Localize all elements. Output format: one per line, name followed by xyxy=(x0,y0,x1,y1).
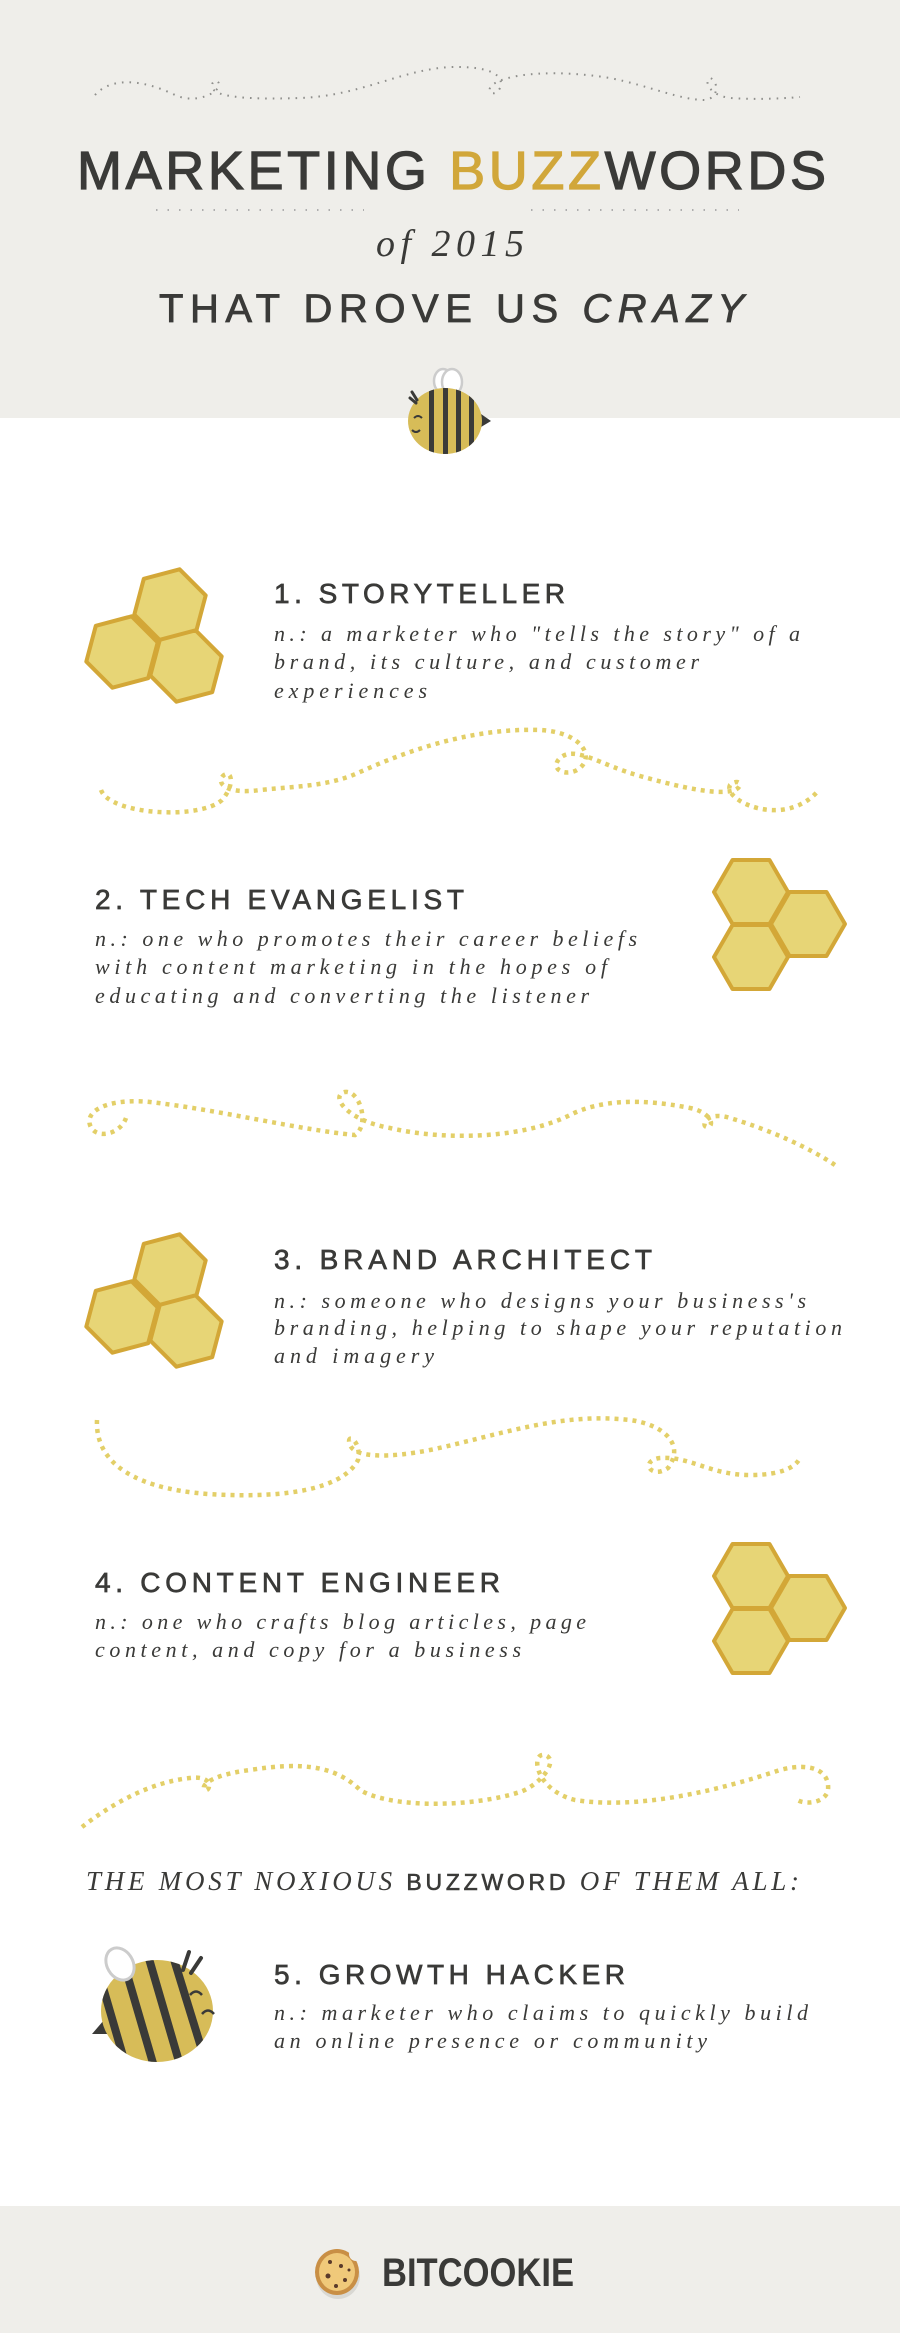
definition: brand architect xyxy=(274,1288,842,1368)
callout: most noxious buzzword: THE MOST NOXIOUS BUZZWORD OF THEM ALL: xyxy=(86,1866,799,1896)
definition: storyteller: brand, its culture, and customer xyxy=(274,649,699,674)
panel: brand architect xyxy=(86,1234,842,1368)
subtitle: of 2015: of 2015 xyxy=(376,223,524,265)
heading: brand architect: 3. BRAND ARCHITECT xyxy=(274,1244,652,1275)
dotted swirl 3 xyxy=(97,1418,800,1495)
heading: tech evangelist: 2. TECH EVANGELIST xyxy=(95,884,464,915)
definition: brand architect: and imagery xyxy=(274,1343,434,1368)
title underline dots xyxy=(156,209,739,211)
definition: brand architect: branding, helping to shape your reputation xyxy=(274,1315,842,1340)
panel: tech evangelist xyxy=(95,860,845,1008)
definition: tech evangelist: educating and converting the listener xyxy=(95,983,589,1008)
subtitle: that drove us crazy: THAT DROVE US CRAZY xyxy=(159,287,747,331)
panel: storyteller xyxy=(86,569,800,703)
footer xyxy=(0,2206,900,2333)
definition: tech evangelist: n.: one who promotes their career beliefs xyxy=(95,926,637,951)
icon: cookie xyxy=(315,2247,363,2299)
icon: small bee xyxy=(408,368,491,454)
heading: growth hacker: 5. GROWTH HACKER xyxy=(274,1959,625,1990)
definition: storyteller: experiences xyxy=(274,678,427,703)
title: MARKETING BUZZWORDS xyxy=(77,141,826,201)
header dotted swirl xyxy=(95,67,800,100)
definition: content engineer xyxy=(95,1609,586,1662)
definition: content engineer: n.: one who crafts blog articles, page xyxy=(95,1609,586,1634)
definition: tech evangelist xyxy=(95,926,637,1008)
panel: growth hacker xyxy=(92,1946,808,2062)
definition: content engineer: content, and copy for a business xyxy=(95,1637,521,1662)
icon: honeycomb left xyxy=(86,569,222,702)
heading: storyteller: 1. STORYTELLER xyxy=(274,578,565,609)
definition: tech evangelist: with content marketing in the hopes of xyxy=(95,954,610,979)
definition: growth hacker: n.: marketer who claims to quickly build xyxy=(274,2000,809,2025)
heading: content engineer: 4. CONTENT ENGINEER xyxy=(95,1567,500,1598)
dotted swirl 2 xyxy=(89,1092,835,1165)
definition: storyteller xyxy=(274,621,800,703)
icon: honeycomb right xyxy=(714,860,845,989)
definition: growth hacker xyxy=(274,2000,809,2053)
definition: storyteller: n.: a marketer who "tells the story" of a xyxy=(274,621,800,646)
icon: honeycomb right xyxy=(714,1544,845,1673)
icon: big bee xyxy=(92,1946,215,2062)
brand name: BITCOOKIE xyxy=(382,2251,574,2295)
header background xyxy=(0,0,900,418)
dotted swirl 4 xyxy=(82,1755,828,1827)
dotted swirl 1 xyxy=(101,730,818,812)
panel: content engineer xyxy=(95,1544,845,1673)
definition: growth hacker: an online presence or community xyxy=(274,2028,707,2053)
definition: brand architect: n.: someone who designs your business's xyxy=(274,1288,806,1313)
icon: honeycomb left xyxy=(86,1234,222,1367)
